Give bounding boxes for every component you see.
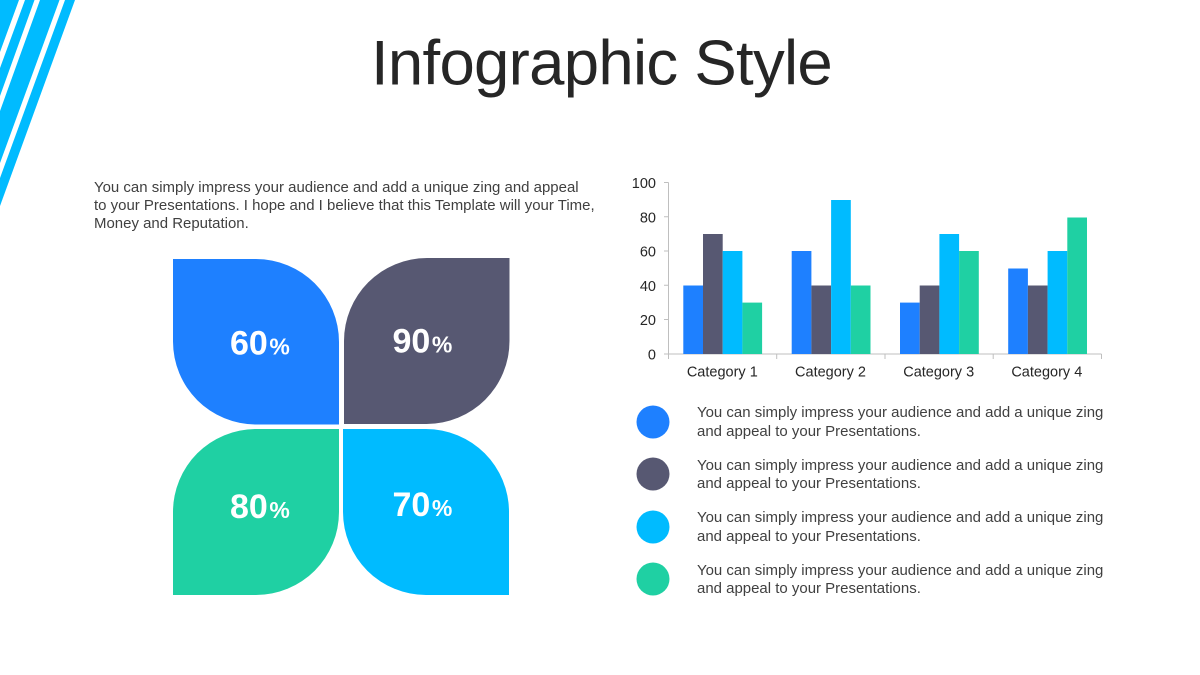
legend item 4 <box>636 562 1103 597</box>
y axis labels: 80 <box>640 210 656 226</box>
x axis labels: Category 3 <box>903 364 974 380</box>
petal: 90%: 90% <box>392 322 452 360</box>
x axis labels: Category 1 <box>687 364 758 380</box>
legend item 4: and appeal to your Presentations. <box>697 580 921 597</box>
legend item 4: You can simply impress your audience and add a unique zing <box>697 562 1103 579</box>
icon: corner stripes <box>0 0 75 206</box>
legend item 2 <box>636 457 1103 492</box>
legend item 3 <box>636 509 1103 545</box>
petal: 60% <box>173 259 339 424</box>
legend item 2: and appeal to your Presentations. <box>697 475 921 492</box>
legend item 1: and appeal to your Presentations. <box>697 423 921 440</box>
petal: 90% <box>344 258 510 424</box>
legend item 3: You can simply impress your audience and add a unique zing <box>697 509 1103 526</box>
y axis labels: 100 <box>632 176 656 192</box>
petal: 80%: 80% <box>230 488 290 526</box>
bars: category 2 <box>792 200 870 354</box>
petal: 70% <box>343 429 509 595</box>
x axis labels: Category 4 <box>1011 364 1082 380</box>
axes <box>664 182 1102 359</box>
legend <box>636 404 1103 597</box>
y axis labels <box>632 176 656 363</box>
intro text block <box>94 179 595 232</box>
y axis labels: 20 <box>640 313 656 329</box>
intro text block: Money and Reputation. <box>94 215 249 232</box>
bars: category 1 <box>683 234 762 354</box>
x axis labels: Category 2 <box>795 364 866 380</box>
panel: petal diagram <box>173 258 510 595</box>
petal: 60%: 60% <box>230 324 290 362</box>
petal: 70%: 70% <box>392 486 452 524</box>
legend item 1 <box>636 404 1103 440</box>
legend item 1: You can simply impress your audience and add a unique zing <box>697 404 1103 421</box>
title: Infographic Style <box>371 28 832 98</box>
y axis labels: 40 <box>640 279 656 295</box>
x axis labels <box>687 364 1082 380</box>
legend item 2: You can simply impress your audience and add a unique zing <box>697 457 1103 474</box>
bars: category 4 <box>1008 218 1087 354</box>
legend item 3: and appeal to your Presentations. <box>697 528 921 545</box>
intro text block: You can simply impress your audience and add a unique zing and appeal <box>94 179 579 196</box>
y axis labels: 0 <box>648 347 656 363</box>
bars: category 3 <box>900 234 979 354</box>
bar chart <box>632 176 1102 380</box>
y axis labels: 60 <box>640 244 656 260</box>
intro text block: to your Presentations. I hope and I believe that this Template will your Time, <box>94 197 595 214</box>
petal: 80% <box>173 429 339 595</box>
